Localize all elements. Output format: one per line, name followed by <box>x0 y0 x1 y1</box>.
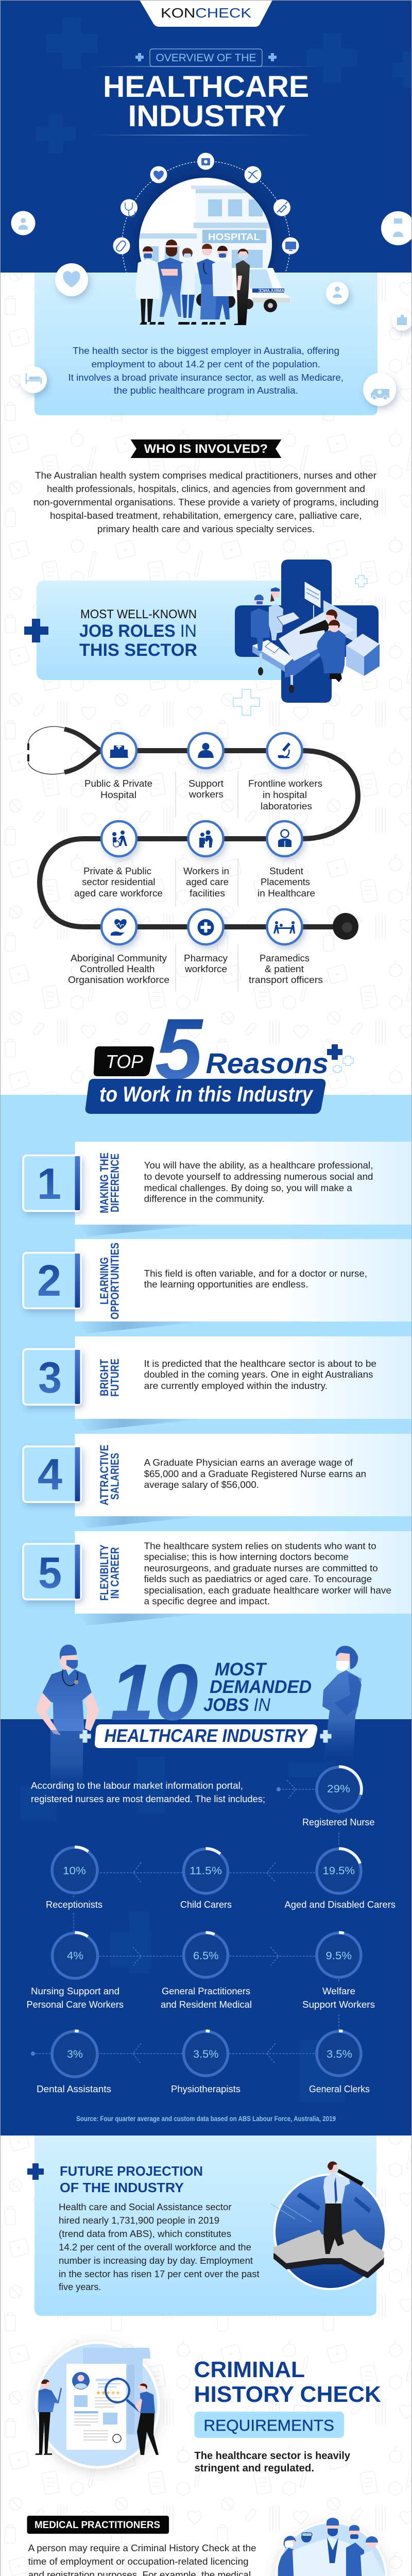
vertical label <box>98 1243 122 1319</box>
node: public private hospital: Public & Private <box>84 778 152 789</box>
number badge: 3 <box>38 1353 62 1402</box>
vertical label: SALARIES <box>108 1453 122 1500</box>
reason text <box>144 1458 366 1490</box>
card: reason 2 <box>23 1239 412 1333</box>
donut: receptionists 10% <box>46 1847 102 1910</box>
vertical label: MAKING THE <box>98 1153 111 1213</box>
heading: future projection: OF THE INDUSTRY <box>60 2180 184 2195</box>
projection text: in the sector has risen 17 per cent over the past <box>59 2269 260 2279</box>
heading: future projection <box>60 2163 203 2195</box>
donut: dental assistants 3% <box>37 2031 111 2094</box>
section: medical practitioners <box>27 2516 386 2576</box>
vertical label <box>98 1359 122 1397</box>
reason text: are currently employed within the industry. <box>144 1381 328 1391</box>
icon: nurse right <box>381 211 412 245</box>
hospital circle <box>139 178 272 273</box>
text: labour market intro <box>31 1781 265 1804</box>
badge <box>27 2516 169 2534</box>
badge: MEDICAL PRACTITIONERS <box>35 2520 160 2531</box>
reason text: neurosurgeons, and graduate nurses are committed to <box>144 1563 378 1573</box>
heading: top 5 reasons: to Work in this Industry <box>99 1082 314 1106</box>
vertical label: IN CAREER <box>108 1547 122 1599</box>
heading: criminal history check: REQUIREMENTS <box>203 2416 334 2434</box>
logo tab: KON CHECK <box>161 5 252 21</box>
donut: registered nurse 29%: 29% <box>327 1783 350 1795</box>
flow connectors <box>33 1780 339 2064</box>
heading: ten most demanded <box>110 1648 312 1737</box>
donut: aged and disabled carers 19.5%: 19.5% <box>322 1865 355 1877</box>
reason text: You will have the ability, as a healthcare professional, <box>144 1160 373 1171</box>
reason text: $65,000 and a Graduate Registered Nurse earns an <box>144 1469 366 1479</box>
illustration: ward scene <box>251 581 380 693</box>
number badge: 1 <box>37 1160 61 1209</box>
description: time of employment or occupation-related licencing <box>28 2556 249 2567</box>
chart: stethoscope job role map <box>27 726 358 992</box>
background doodle pattern lower <box>0 2136 412 2576</box>
node: workers in aged care: aged care <box>186 877 229 887</box>
donut: dental assistants 3%: Dental Assistants <box>37 2084 111 2094</box>
intro text: employment to about 14.2 per cent of the population. <box>92 359 320 369</box>
node: residential aged care: sector residential <box>82 877 156 887</box>
projection text: Health care and Social Assistance sector <box>59 2202 232 2212</box>
text: who is involved: health professionals, hospitals, clinics, and agencies from government and <box>47 484 365 494</box>
vertical label <box>98 1545 122 1601</box>
banner: healthcare industry: HEALTHCARE INDUSTRY <box>104 1726 308 1746</box>
reason text: This field is often variable, and for a doctor or nurse, <box>144 1268 367 1279</box>
chest piece <box>333 913 358 940</box>
donut: registered nurse 29% <box>302 1767 375 1827</box>
reason text: average salary of $56,000. <box>144 1480 259 1490</box>
card: reason 3 <box>23 1336 412 1431</box>
heading: job roles: JOB ROLES IN <box>79 621 197 641</box>
node: aboriginal community <box>68 909 169 985</box>
title: HEALTHCARE <box>103 70 309 104</box>
reason text: to devote yourself to addressing numerous social and <box>144 1172 373 1182</box>
text: stringent and regulated: stringent and regulated. <box>195 2463 314 2474</box>
illustration: ambulance and staff <box>135 240 291 325</box>
card: reason 1 <box>23 1142 412 1236</box>
donut: welfare support 9.5%: 9.5% <box>325 1950 352 1962</box>
vertical label <box>98 1153 122 1213</box>
reason text: a specific degree and impact. <box>144 1596 270 1606</box>
reason text: difference in the community. <box>144 1194 265 1204</box>
icon: hospital building <box>392 310 412 331</box>
panel: job roles banner <box>24 560 380 715</box>
dashed icon arc <box>122 161 290 273</box>
icon: plus <box>27 2163 44 2180</box>
description: A person may require a Criminal History Check at the <box>28 2543 256 2553</box>
donut: nursing support 4%: Nursing Support and <box>31 1986 119 1996</box>
text: who is involved: The Australian health system comprises medical practitioners, nurses and other <box>35 470 376 481</box>
donut: general practitioners 6.5%: and Resident Medical <box>161 1999 252 2010</box>
overview label: OVERVIEW OF THE <box>156 52 256 64</box>
reason text: A Graduate Physician earns an average wage of <box>144 1458 353 1468</box>
panel: ten jobs dark background <box>0 1719 412 2136</box>
heading: criminal history check: HISTORY CHECK <box>194 2382 381 2407</box>
donut: child carers 11.5%: Child Carers <box>180 1900 232 1910</box>
number badge <box>23 1447 81 1502</box>
node: frontline laboratories <box>248 733 322 811</box>
hospital circle: HOSPITAL <box>208 232 260 242</box>
heading: ten most demanded: JOBS IN <box>203 1695 271 1715</box>
donut: general practitioners 6.5%: 6.5% <box>193 1950 218 1962</box>
node: frontline laboratories: in hospital <box>263 790 307 800</box>
panel: future projection <box>27 2136 386 2316</box>
donut: welfare support 9.5%: Welfare <box>322 1986 355 1996</box>
number badge <box>23 1155 81 1211</box>
illustration: ambulance and staff: AMBULANCE <box>258 289 284 293</box>
donut: dental assistants 3%: 3% <box>67 2048 83 2060</box>
big cross <box>235 560 379 703</box>
node: frontline laboratories: laboratories <box>261 801 312 811</box>
intro text: It involves a broad private insurance sector, as well as Medicare, <box>68 372 344 383</box>
icon: plus <box>24 619 48 642</box>
staff <box>135 240 250 325</box>
title: INDUSTRY <box>128 99 286 133</box>
reason text: the learning opportunities are endless. <box>144 1279 308 1290</box>
icon: ambulance <box>363 373 396 406</box>
connector start and end dots <box>31 1787 281 2056</box>
intro text: The health sector is the biggest employer in Australia, offering <box>73 346 339 356</box>
heading: criminal history check <box>194 2357 381 2438</box>
donut: welfare support 9.5% <box>302 1933 375 2010</box>
node: pharmacy <box>184 909 228 974</box>
reason text: fields such as paediatrics or aged care. To encourage <box>144 1574 372 1584</box>
node: aboriginal community: Controlled Health <box>80 964 154 974</box>
donut: receptionists 10%: Receptionists <box>46 1900 102 1910</box>
illustration: criminal check document <box>35 2343 159 2467</box>
projection text: number is increasing day by day. Employment <box>59 2256 253 2266</box>
panel: reasons background <box>0 1095 412 1719</box>
vertical label <box>98 1445 122 1505</box>
logo tab <box>140 0 272 27</box>
panel: hero header <box>1 1 411 273</box>
text: labour market intro: registered nurses are most demanded. The list includes; <box>31 1794 265 1804</box>
projection text: five years. <box>59 2282 101 2292</box>
reason text <box>144 1359 376 1391</box>
node: workers in aged care <box>183 821 229 899</box>
number badge: 5 <box>38 1549 62 1598</box>
reason text <box>144 1268 367 1290</box>
illustration: man on Australia map <box>270 2161 386 2289</box>
panel: intro <box>20 240 412 415</box>
donut: nursing support 4% <box>27 1933 124 2010</box>
heading: future projection: FUTURE PROJECTION <box>60 2163 203 2179</box>
projection text: 14.2 per cent of the overall workforce and the <box>59 2242 251 2252</box>
donut: general practitioners 6.5%: General Practitioners <box>162 1986 250 1996</box>
number badge: 2 <box>37 1257 61 1306</box>
outlined plus large <box>233 689 260 715</box>
node: support workers: Support <box>188 778 224 789</box>
text: who is involved: primary health care and various specialty services. <box>97 524 315 534</box>
overview label <box>90 49 322 67</box>
text: stringent and regulated <box>195 2450 351 2474</box>
projection text: (trend data from ABS), which constitutes <box>59 2229 231 2239</box>
node: student placements: in Healthcare <box>258 888 315 899</box>
donut: welfare support 9.5%: Support Workers <box>302 1999 375 2010</box>
icon: bed <box>20 366 47 393</box>
reason text: specialise; this is how interning doctors become <box>144 1552 349 1562</box>
donut: physiotherapists 3.5%: Physiotherapists <box>171 2084 241 2094</box>
node: support workers: workers <box>188 789 224 800</box>
text: labour market intro: According to the labour market information portal, <box>31 1781 243 1791</box>
node: student placements: Placements <box>261 877 310 887</box>
vertical label: FLEXIBILITY <box>98 1545 111 1601</box>
node: residential aged care: Private & Public <box>83 866 151 876</box>
donut: aged and disabled carers 19.5%: Aged and Disabled Carers <box>284 1900 396 1910</box>
donut: physiotherapists 3.5%: 3.5% <box>193 2048 218 2060</box>
donut: nursing support 4%: Personal Care Workers <box>27 1999 124 2010</box>
node: pharmacy: Pharmacy <box>184 953 228 963</box>
donut: registered nurse 29%: Registered Nurse <box>302 1817 375 1827</box>
heading: who is involved: WHO IS INVOLVED? <box>144 442 268 456</box>
heading: top 5 reasons: Reasons <box>206 1047 329 1079</box>
node: paramedics: & patient <box>265 964 304 974</box>
donut: child carers 11.5% <box>180 1849 232 1910</box>
donut: physiotherapists 3.5% <box>171 2031 241 2094</box>
number badge: 4 <box>38 1450 62 1499</box>
donut: general clerks 3.5%: 3.5% <box>327 2048 352 2060</box>
donut: child carers 11.5%: 11.5% <box>190 1865 222 1877</box>
projection text: hired nearly 1,731,900 people in 2019 <box>59 2215 219 2226</box>
intro text <box>68 346 344 396</box>
node: paramedics <box>249 909 323 985</box>
card: reason 5 <box>23 1531 412 1625</box>
node: support workers <box>188 733 224 800</box>
source note: Source: Four quarter average and custom data based on ABS Labour Force, Australia, 2019 <box>76 2114 336 2123</box>
reason text: The healthcare system relies on students who want to <box>144 1541 376 1551</box>
vertical label: DIFFERENCE <box>108 1154 122 1212</box>
illustration: medical team <box>276 2518 386 2576</box>
heading: top 5 reasons <box>85 1001 353 1114</box>
vertical label: BRIGHT <box>98 1359 111 1396</box>
vertical label: FUTURE <box>108 1359 122 1397</box>
heading: ten most demanded: 10 <box>110 1648 198 1737</box>
donut: aged and disabled carers 19.5% <box>284 1849 396 1910</box>
intro text: the public healthcare program in Australia. <box>114 385 298 396</box>
reason text <box>144 1160 373 1204</box>
description <box>28 2543 258 2576</box>
text: who is involved <box>33 470 379 534</box>
reason text: medical challenges. By doing so, you will make a <box>144 1183 353 1193</box>
number badge <box>23 1544 81 1599</box>
arc icons <box>113 152 299 255</box>
title <box>90 70 317 135</box>
dark halo behind hospital <box>130 169 281 273</box>
reason text <box>144 1541 391 1606</box>
node: student placements: Student <box>269 866 303 876</box>
node: aboriginal community: Organisation workforce <box>68 975 169 985</box>
node: paramedics: transport officers <box>249 975 323 985</box>
dividers <box>176 771 238 992</box>
heading: ten most demanded: MOST <box>215 1659 267 1680</box>
stethoscope tube <box>27 726 358 927</box>
text: stringent and regulated: The healthcare sector is heavily <box>195 2450 351 2462</box>
reason text: specialisation, each graduate healthcare worker will have <box>144 1585 391 1596</box>
reason text: doubled in the coming years. One in eight Australians <box>144 1369 373 1380</box>
projection text <box>59 2202 260 2292</box>
illustration: surgeon left <box>36 1645 99 1793</box>
text: who is involved: hospital-based treatment, rehabilitation, emergency care, palliative care, <box>50 511 362 521</box>
node: paramedics: Paramedics <box>260 953 310 963</box>
node: student placements <box>258 821 315 899</box>
heading: job roles: MOST WELL-KNOWN <box>80 607 197 621</box>
illustration: criminal check document: ★★★★★ <box>96 2390 121 2396</box>
heading: job roles: THIS SECTOR <box>79 640 197 660</box>
node: workers in aged care: Workers in <box>183 866 229 876</box>
icon: doctor <box>326 282 349 304</box>
heading: ten most demanded: DEMANDED <box>210 1677 312 1697</box>
donut: nursing support 4%: 4% <box>67 1950 83 1962</box>
vertical label: ATTRACTIVE <box>98 1445 111 1505</box>
illustration: nurse right <box>322 1646 362 1762</box>
heading: criminal history check: CRIMINAL <box>194 2357 305 2382</box>
node: workers in aged care: facilities <box>190 888 225 899</box>
node: public private hospital <box>84 733 152 800</box>
node: aboriginal community: Aboriginal Community <box>71 953 167 963</box>
number badge <box>23 1253 81 1309</box>
icon: heart <box>55 263 88 296</box>
icon: nurse left <box>11 211 35 235</box>
heading: who is involved <box>131 439 281 458</box>
heading: top 5 reasons: TOP <box>106 1051 143 1072</box>
number badge <box>23 1349 81 1404</box>
node: residential aged care: aged care workforce <box>74 888 163 899</box>
donut: general practitioners 6.5% <box>161 1933 252 2010</box>
node: pharmacy: workforce <box>184 964 227 974</box>
node: residential aged care <box>74 821 163 899</box>
node: public private hospital: Hospital <box>100 790 136 800</box>
text: who is involved: non-governmental organisations. These provide a variety of programs, including <box>33 497 379 507</box>
digit five: 5 <box>155 1001 204 1097</box>
heading: job roles <box>79 607 197 660</box>
donut: general clerks 3.5% <box>309 2031 370 2094</box>
reason text: It is predicted that the healthcare sector is about to be <box>144 1359 376 1369</box>
card: reason 4 <box>23 1434 412 1528</box>
donut: general clerks 3.5%: General Clerks <box>309 2084 370 2094</box>
background doodle pattern upper <box>0 273 412 1095</box>
outlined plus small <box>355 575 367 587</box>
donut: receptionists 10%: 10% <box>63 1865 86 1877</box>
node: frontline laboratories: Frontline workers <box>248 778 322 789</box>
vertical label: OPPORTUNITIES <box>108 1243 122 1319</box>
vertical label: LEARNING <box>98 1257 111 1304</box>
